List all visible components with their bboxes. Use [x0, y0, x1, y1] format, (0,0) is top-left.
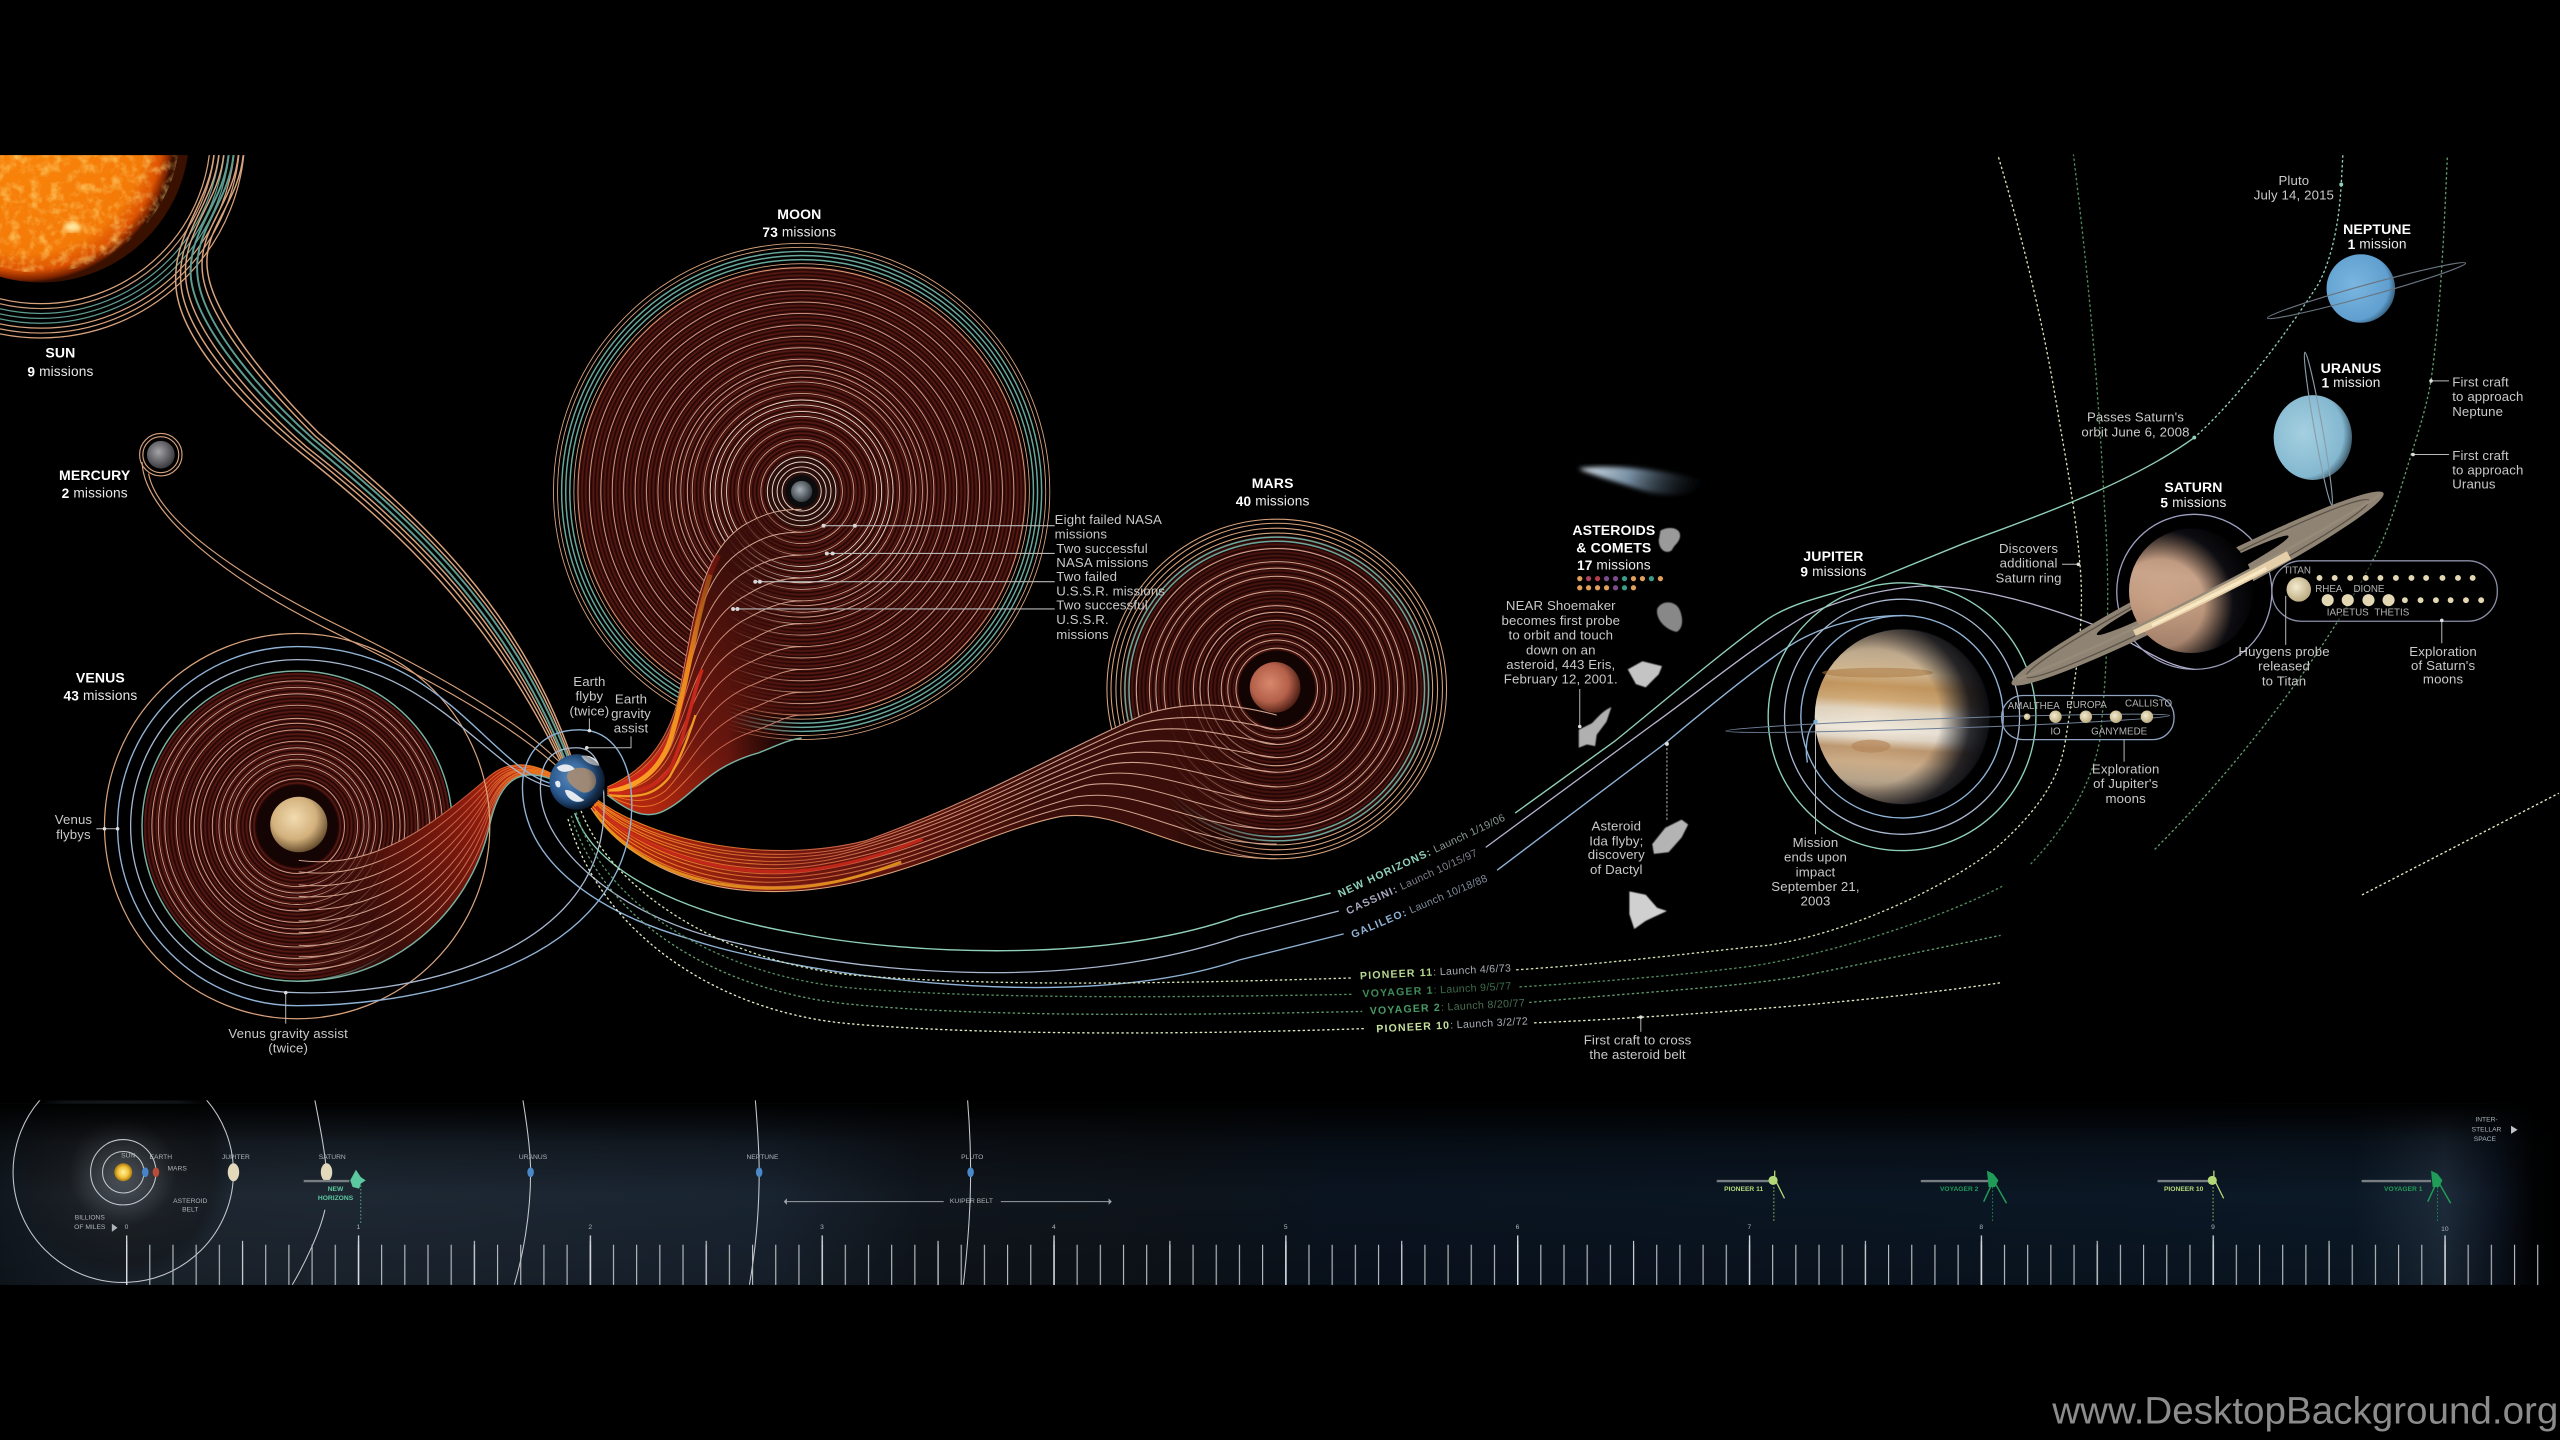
huygens note: released: [2258, 659, 2310, 674]
timeline planet labels: ASTEROID: [173, 1198, 207, 1205]
interstellar space label: STELLAR: [2472, 1126, 2502, 1133]
asteroids and comets label: & COMETS: [1576, 540, 1651, 556]
timeline planet labels: OF MILES: [74, 1224, 106, 1231]
kuiper belt arrow: KUIPER BELT: [950, 1198, 993, 1205]
near shoemaker note: down on an: [1526, 642, 1596, 657]
timeline planet labels: NEPTUNE: [746, 1154, 779, 1161]
venus label: [64, 670, 137, 703]
interstellar space label: SPACE: [2474, 1136, 2497, 1143]
huygens note: to Titan: [2262, 673, 2306, 688]
neptune: [2266, 254, 2467, 324]
earth gravity assist note: assist: [614, 721, 649, 736]
asteroids and comets label: 17 missions: [1577, 557, 1651, 572]
saturn orbit note: [2081, 410, 2196, 440]
mercury and its trajectory: [140, 433, 565, 771]
ida note: of Dactyl: [1590, 862, 1643, 877]
earth flyby note: (twice): [569, 704, 609, 719]
saturn moons note: Exploration: [2409, 644, 2477, 659]
asteroids and comets label: ASTEROIDS: [1572, 522, 1655, 538]
timeline planet labels: BILLIONS: [75, 1214, 105, 1221]
moon spiral disc: [553, 243, 1050, 740]
mars label: MARS: [1252, 475, 1294, 491]
venus flybys note: Venus: [55, 812, 92, 827]
mars planet: [1250, 662, 1300, 713]
venus flybys note: flybys: [56, 827, 91, 842]
saturn moons note: [2409, 619, 2477, 687]
earth gravity assist note: gravity: [611, 706, 651, 721]
pioneer 10 dotted trajectory: [568, 793, 2558, 1033]
ida note: Ida flyby;: [1589, 833, 1643, 848]
venus gravity assist note: (twice): [268, 1041, 308, 1056]
moon: [791, 481, 812, 502]
venus gravity assist note: Venus gravity assist: [228, 1026, 348, 1041]
distance scale ticks and numbers: 2: [588, 1224, 592, 1231]
asteroid belt note: [1584, 1015, 1692, 1062]
pluto note: Pluto: [2278, 173, 2309, 188]
venus spiral disc: [142, 671, 452, 981]
earth gravity assist note: Earth: [615, 691, 647, 706]
moon label: 73 missions: [762, 224, 836, 239]
kuiper belt arrow: [784, 1198, 1112, 1205]
sun label: [27, 345, 93, 379]
asteroid belt note: the asteroid belt: [1589, 1047, 1686, 1062]
uranus approach note: [2411, 448, 2524, 492]
spacecraft: pioneer 10: [2158, 1171, 2224, 1221]
moon mission callouts: Two failed: [1056, 569, 1117, 584]
jupiter moons panel: AMALTHEA: [2008, 701, 2060, 712]
mars label: [1236, 475, 1310, 509]
saturn ring note: Discovers: [1999, 541, 2058, 556]
venus label: VENUS: [76, 670, 125, 686]
venus tail fan to Earth: [299, 765, 558, 981]
asteroid belt note: First craft to cross: [1584, 1032, 1692, 1047]
mercury label: MERCURY: [59, 467, 131, 483]
moon mission callouts: missions: [1056, 627, 1109, 642]
earth flyby note: Earth: [573, 674, 606, 689]
pioneer 11 dotted trajectory: [581, 157, 2081, 983]
jupiter moons panel: of Jupiter's: [2093, 776, 2159, 791]
timeline planet labels: BELT: [182, 1206, 198, 1213]
timeline planets: [114, 1163, 974, 1181]
spacecraft: new horizons: HORIZONS: [318, 1195, 354, 1202]
saturn label: [2160, 479, 2227, 510]
jupiter impact note: ends upon: [1784, 850, 1847, 865]
uranus approach note: to approach: [2452, 463, 2524, 478]
near shoemaker note: NEAR Shoemaker: [1506, 598, 1616, 613]
venus planet: [270, 797, 327, 852]
earth gravity assist note: [585, 691, 651, 750]
near shoemaker note: to orbit and touch: [1509, 628, 1613, 643]
jupiter label: [1800, 548, 1867, 579]
spacecraft: voyager 1: [2362, 1171, 2451, 1221]
sun with mission rings: [0, 155, 244, 339]
earth: [549, 754, 605, 810]
jupiter moons panel: GANYMEDE: [2091, 727, 2148, 738]
saturn moons panel: THETIS: [2374, 608, 2410, 619]
new horizons dotted continuation: [2194, 155, 2343, 438]
earth flyby note: flyby: [575, 689, 604, 704]
sun label: 9 missions: [27, 364, 93, 379]
neptune label: NEPTUNE: [2343, 221, 2411, 237]
huygens note: [2238, 596, 2330, 688]
timeline orbits: [12, 1100, 972, 1285]
timeline planet labels: SATURN: [319, 1154, 346, 1161]
neptune approach note: First craft: [2452, 375, 2509, 390]
spacecraft: voyager 2: [1921, 1171, 2007, 1221]
distance scale ticks and numbers: 7: [1748, 1224, 1752, 1231]
timeline planet labels: MARS: [167, 1165, 187, 1172]
asteroid mission dots: [1577, 576, 1663, 590]
jupiter label: 9 missions: [1800, 564, 1867, 579]
saturn orbit note: Passes Saturn's: [2087, 410, 2184, 425]
moon mission callouts: missions: [1055, 526, 1107, 541]
timeline planet labels: EARTH: [150, 1154, 172, 1161]
mercury label: [59, 467, 131, 501]
distance scale ticks and numbers: 10: [2441, 1226, 2449, 1233]
saturn moons panel: IAPETUS: [2327, 608, 2369, 619]
moon mission callouts: Eight failed NASA: [1055, 512, 1162, 527]
mercury label: 2 missions: [62, 486, 128, 501]
asteroids and comets label: [1572, 522, 1655, 572]
comet: [1579, 467, 1714, 495]
distance timeline band: [0, 1100, 2528, 1285]
mars tail fan to Earth: [591, 705, 1277, 892]
moon mission callouts: U.S.S.R.: [1056, 612, 1109, 627]
moon label: [762, 206, 836, 239]
cassini trajectory: [131, 514, 2272, 993]
neptune approach note: Neptune: [2452, 404, 2503, 419]
trajectory launch labels: CASSINI: Launch 10/15/97: [1344, 847, 1480, 917]
neptune approach note: to approach: [2452, 389, 2524, 404]
ida note: Asteroid: [1592, 819, 1641, 834]
uranus: [2274, 351, 2352, 506]
new horizons trajectory: [575, 438, 2194, 951]
moon mission callouts: U.S.S.R. missions: [1056, 584, 1165, 599]
moon label: MOON: [777, 206, 821, 222]
distance scale ticks and numbers: 4: [1052, 1224, 1056, 1231]
trajectory launch labels: PIONEER 10: Launch 3/2/72: [1376, 1015, 1528, 1035]
venus flybys note: [55, 812, 119, 842]
jupiter impact note: impact: [1796, 864, 1836, 879]
trajectory launch labels: PIONEER 11: Launch 4/6/73: [1360, 962, 1512, 982]
spacecraft: pioneer 10: PIONEER 10: [2164, 1186, 2204, 1193]
spacecraft: voyager 1: VOYAGER 1: [2384, 1186, 2423, 1193]
jupiter moons panel: [2002, 696, 2174, 806]
moon mission callouts: Two successful: [1056, 597, 1148, 612]
spacecraft: pioneer 11: PIONEER 11: [1724, 1186, 1763, 1193]
pluto note: [2254, 173, 2343, 203]
saturn with rings: [2003, 476, 2392, 702]
venus gravity assist note: [228, 991, 348, 1056]
uranus label: [2321, 360, 2381, 390]
saturn moons panel: DIONE: [2353, 584, 2385, 595]
voyager 2 dotted trajectory: [571, 157, 2447, 1014]
spacecraft: voyager 2: VOYAGER 2: [1940, 1186, 1979, 1193]
uranus label: URANUS: [2321, 360, 2381, 376]
saturn ring note: additional: [2000, 556, 2058, 571]
jupiter moons panel: moons: [2106, 791, 2146, 806]
jupiter moons panel: Exploration: [2092, 761, 2160, 776]
saturn orbit note: orbit June 6, 2008: [2081, 424, 2190, 439]
moon mission callouts: NASA missions: [1056, 555, 1149, 570]
near shoemaker note: February 12, 2001.: [1504, 672, 1618, 687]
saturn moons panel: TITAN: [2283, 566, 2311, 577]
moon mission callouts: Two successful: [1056, 541, 1148, 556]
spacecraft: pioneer 11: [1717, 1171, 1784, 1221]
trajectory launch labels: GALILEO: Launch 10/18/88: [1349, 873, 1490, 941]
jupiter moons panel: CALLISTO: [2125, 699, 2173, 710]
uranus approach note: Uranus: [2452, 477, 2496, 492]
spacecraft: new horizons: NEW: [328, 1186, 344, 1193]
earth flyby note: [569, 674, 609, 732]
watermark: www.DesktopBackground.org: [2051, 1390, 2558, 1432]
interstellar space label: INTER-: [2475, 1116, 2498, 1123]
interstellar space label: [2472, 1116, 2518, 1143]
jupiter impact note: Mission: [1793, 835, 1838, 850]
near shoemaker note: asteroid, 443 Eris,: [1506, 657, 1615, 672]
venus label: 43 missions: [64, 688, 137, 703]
saturn label: SATURN: [2164, 479, 2223, 495]
moon mission callouts: [731, 512, 1165, 642]
sun label: SUN: [45, 345, 75, 361]
distance scale ticks and numbers: 3: [820, 1224, 824, 1231]
distance scale ticks and numbers: [125, 1224, 2542, 1285]
near shoemaker note: becomes first probe: [1502, 613, 1620, 628]
jupiter moons panel: IO: [2050, 727, 2061, 738]
saturn ring note: Saturn ring: [1996, 570, 2062, 585]
near shoemaker note: [1502, 598, 1620, 728]
jupiter impact note: [1771, 720, 1860, 909]
jupiter moons panel: EUROPA: [2066, 700, 2107, 711]
saturn moons note: moons: [2423, 672, 2464, 687]
mars spiral disc: [1107, 519, 1447, 859]
ida note: discovery: [1588, 847, 1645, 862]
trajectory launch labels: NEW HORIZONS: Launch 1/19/06: [1336, 812, 1507, 900]
trajectory launch labels: VOYAGER 1: Launch 9/5/77: [1362, 980, 1512, 1000]
neptune label: [2343, 221, 2411, 251]
distance scale ticks and numbers: 5: [1284, 1224, 1288, 1231]
mars label: 40 missions: [1236, 494, 1310, 509]
distance scale ticks and numbers: 1: [357, 1224, 361, 1231]
distance scale ticks and numbers: 0: [125, 1224, 129, 1231]
saturn moons panel: RHEA: [2315, 584, 2343, 595]
distance scale ticks and numbers: 8: [1979, 1224, 1983, 1231]
pluto note: July 14, 2015: [2254, 188, 2334, 203]
saturn label: 5 missions: [2160, 495, 2227, 510]
timeline planet labels: SUN: [121, 1152, 135, 1159]
voyager 1 dotted trajectory: [576, 155, 2108, 997]
spacecraft: new horizons: [304, 1170, 366, 1224]
timeline planet labels: [74, 1152, 983, 1232]
neptune label: 1 mission: [2348, 236, 2407, 251]
uranus label: 1 mission: [2321, 375, 2381, 390]
saturn moons panel: [2272, 561, 2497, 621]
asteroid images: [1579, 528, 1688, 929]
timeline planet labels: JUPITER: [222, 1154, 250, 1161]
jupiter impact note: September 21,: [1771, 879, 1860, 894]
uranus approach note: First craft: [2452, 448, 2509, 463]
distance scale ticks and numbers: 9: [2211, 1224, 2215, 1231]
sun mission band to Earth: [176, 155, 575, 767]
saturn ring note: [1996, 541, 2080, 585]
saturn moons note: of Saturn's: [2411, 658, 2475, 673]
jupiter label: JUPITER: [1803, 548, 1864, 564]
jupiter impact note: 2003: [1801, 894, 1830, 909]
jupiter: [1726, 629, 2170, 805]
trajectory launch labels: VOYAGER 2: Launch 8/20/77: [1369, 997, 1525, 1017]
venus orange orbit: [104, 633, 490, 1019]
ida note: [1588, 742, 1669, 877]
trajectory launch labels: [1336, 812, 1528, 1035]
distance scale ticks and numbers: 6: [1516, 1224, 1520, 1231]
moon tail fan to Earth: [607, 509, 802, 815]
galileo trajectory: [118, 616, 2003, 1006]
timeline planet labels: URANUS: [519, 1154, 548, 1161]
timeline planet labels: PLUTO: [961, 1154, 983, 1161]
neptune approach note: [2429, 375, 2524, 419]
huygens note: Huygens probe: [2238, 644, 2330, 659]
